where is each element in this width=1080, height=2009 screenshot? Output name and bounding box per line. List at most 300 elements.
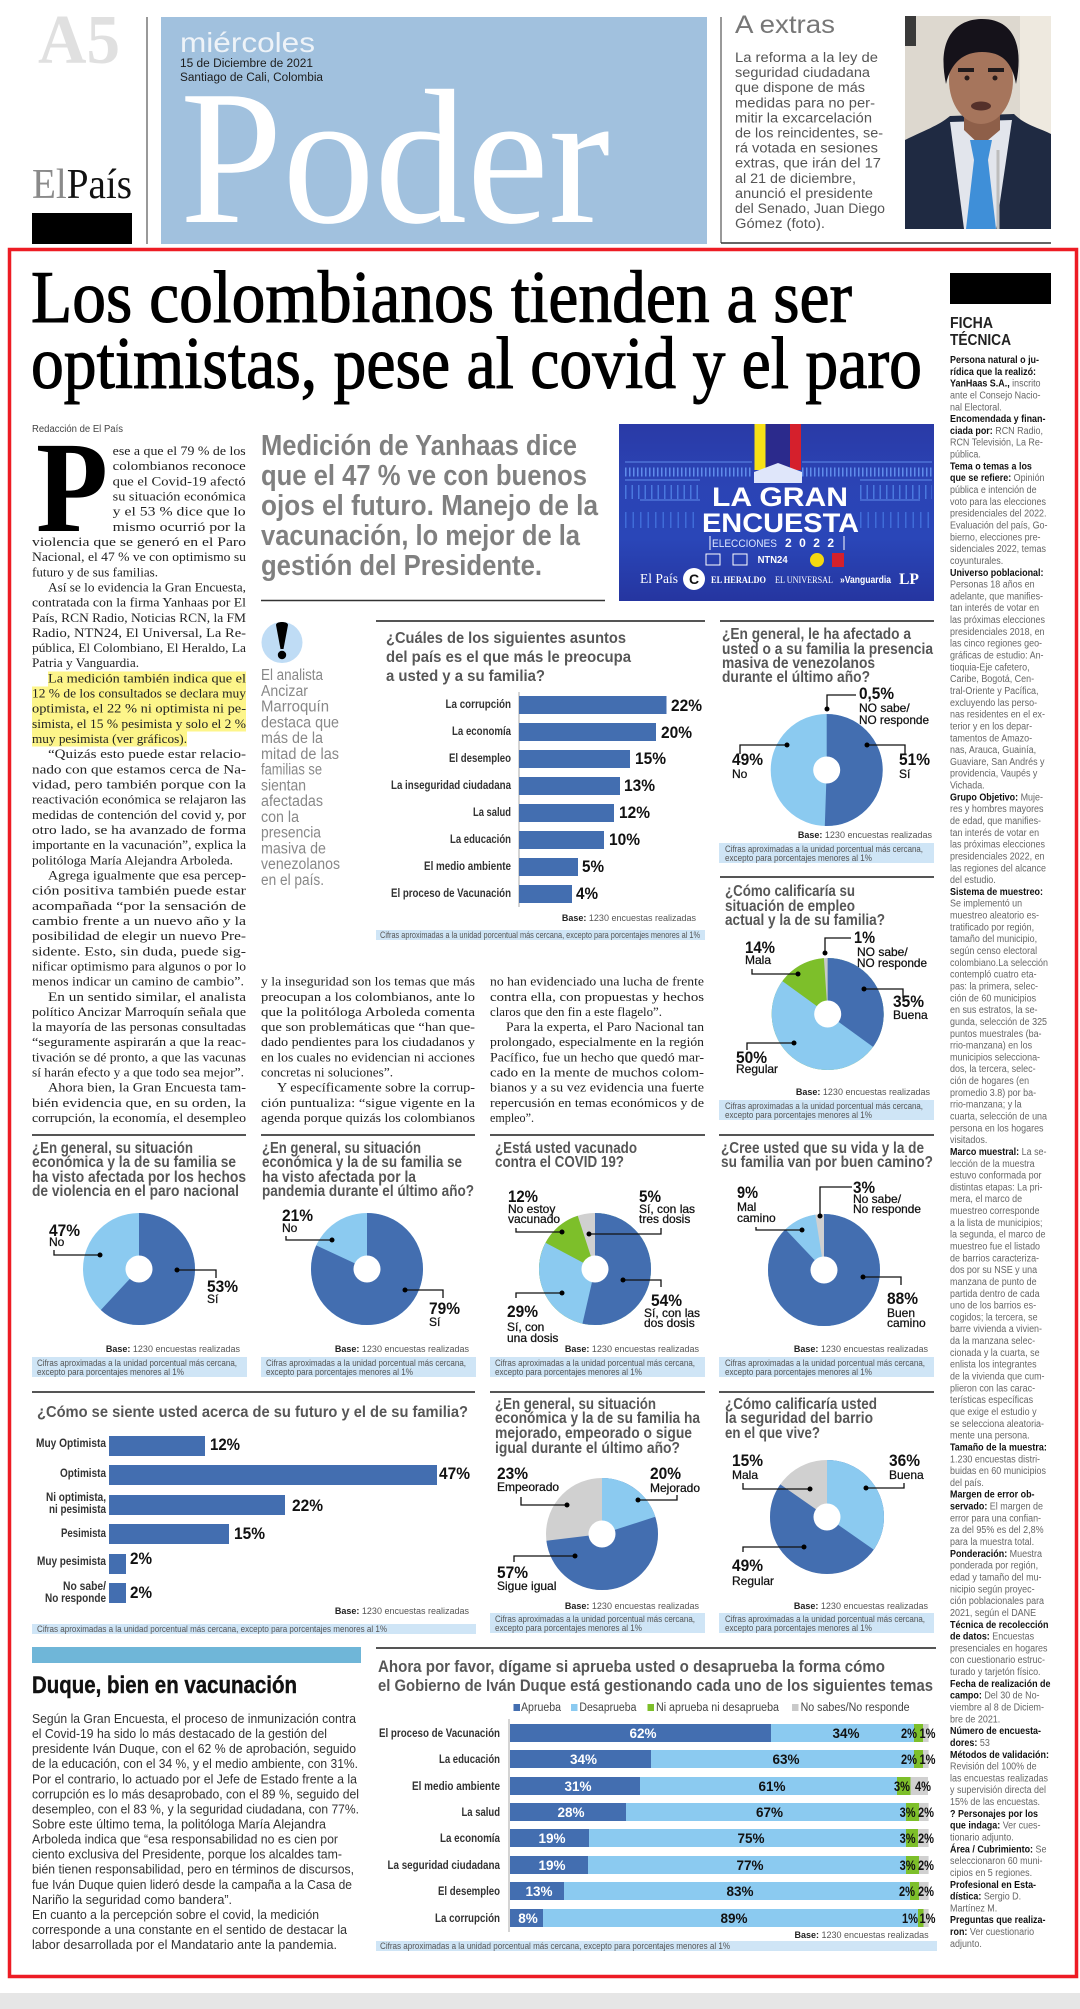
text block: ficha: presenciales en hogares <box>950 1643 1048 1655</box>
text block: ficha: Evaluación del país, Go- <box>950 520 1048 532</box>
pie chart: pandemia: Sí <box>429 1315 441 1329</box>
text block: ficha: pública e intención de <box>950 485 1037 496</box>
text block: ficha: ción de hogares (en <box>950 1076 1029 1087</box>
row: La corrupción: 8% <box>518 1911 538 1926</box>
callout: analista: familias se <box>261 762 322 779</box>
bar chart: asuntos que preocupan: Base: 1230 encuestas realizadas <box>562 913 696 923</box>
text block: ficha: presidenciales del 2022. <box>950 508 1047 520</box>
article column 1 <box>32 416 247 1125</box>
article column 1: simista, el 15 % pesimista y solo el 2 % <box>32 716 246 731</box>
black box: masthead <box>32 213 132 244</box>
panel: A extras <box>721 11 1051 243</box>
row: La educación: 1% <box>920 1752 936 1767</box>
section banner: Poder: Poder <box>180 51 610 264</box>
text block: ficha: Marco muestral: La se- <box>950 1146 1047 1158</box>
panel: Duque, bien en vacunación: desempleo, con el 83 %, y la seguridad ciudadana, con 77%. <box>32 1801 359 1816</box>
pie chart: pandemia: 79% <box>429 1299 460 1318</box>
row: La economía: La economía <box>440 1833 501 1845</box>
text block: ficha: y supervisión directa del <box>950 1785 1046 1796</box>
text block: ficha: lección de la muestra <box>950 1158 1035 1170</box>
panel: Duque, bien en vacunación: Según la Gran Encuesta, el proceso de inmunización contra <box>32 1711 357 1726</box>
text block: ficha: persona en los hogares <box>950 1123 1044 1135</box>
text block: ficha: nas residentes en el ex- <box>950 709 1045 721</box>
pie chart: seguridad del barrio: 36% <box>889 1451 920 1470</box>
pie chart: violencia paro nacional: ha visto afectada por los hechos <box>32 1169 246 1186</box>
text block: ficha: las encuestas realizadas <box>950 1773 1048 1785</box>
black box <box>950 273 1051 304</box>
article column 2: en los cuales no evidencian ni acciones <box>261 1049 475 1064</box>
image: La Gran Encuesta banner: ELECCIONES <box>712 538 777 550</box>
subheading: ojos el futuro. Manejo de la <box>261 490 599 522</box>
text block: ficha: tioquia-Eje cafetero, <box>950 662 1030 674</box>
row: La economía: 19% <box>538 1831 566 1846</box>
text block: ficha: partida dentro de cada <box>950 1288 1040 1300</box>
text block: ficha: excluyendo las perso- <box>950 697 1037 709</box>
row: La salud: 2% <box>918 1805 934 1820</box>
bar chart: futuro: No sabe/ <box>63 1581 107 1593</box>
article column 1: político Ancizar Marroquín señala que <box>32 1004 246 1019</box>
icon: exclamation mark <box>262 622 302 663</box>
heading: ficha técnica: FICHA <box>950 315 993 332</box>
pie chart: seguridad del barrio: 49% <box>732 1556 763 1575</box>
article column 1: pública, El Colombiano, El Heraldo, La <box>32 640 246 655</box>
panel: Duque, bien en vacunación: de la educación, con el 34 %, y el medio ambiente, con 31%. <box>32 1756 358 1771</box>
pie chart: violencia paro nacional: Base: 1230 encuestas realizadas <box>106 1344 240 1354</box>
bar chart: asuntos que preocupan: 20% <box>661 723 692 742</box>
article column 1: acompañada “por la sensación de <box>32 898 246 913</box>
bar chart: futuro: Optimista <box>60 1468 107 1480</box>
stacked bar chart: aprobación gestión Duque <box>376 1648 937 1951</box>
pie chart: vacunado: Sí, con <box>507 1320 544 1334</box>
title <box>31 257 922 405</box>
row: La educación: La educación <box>439 1754 500 1766</box>
row: El proceso de Vacunación: 34% <box>832 1726 860 1741</box>
bar chart: asuntos que preocupan: 10% <box>609 830 640 849</box>
callout: analista <box>261 622 340 889</box>
text block: ficha: adelante, que manifies- <box>950 591 1043 603</box>
bar chart: asuntos que preocupan <box>376 621 705 940</box>
text block: ficha: municipios selecciona- <box>950 1052 1040 1064</box>
text block: ficha: del estudio. <box>950 875 996 886</box>
article column 3: claros que den fin a este flagelo”. <box>490 1004 662 1019</box>
row: El proceso de Vacunación: 2% <box>901 1726 917 1741</box>
text block: ficha: tral-Oriente y Pacífica, <box>950 685 1039 697</box>
callout: analista: venezolanos <box>261 856 340 873</box>
article column 1: nificar optimismo para algunos o por lo <box>32 958 246 973</box>
article column 1: ese a que el 79 % de los <box>113 443 246 458</box>
article column 1: importante en la vacunación”, explica la <box>32 837 246 852</box>
pie chart: situación económica: 23% <box>497 1464 528 1483</box>
text block: ficha: ante el Consejo Nacio- <box>950 390 1041 402</box>
text block: ficha: Número de encuesta- <box>950 1726 1041 1737</box>
panel: Duque, bien en vacunación: bién tienen responsabilidad, pero en términos de discursos, <box>32 1862 354 1877</box>
text block: ficha: Vichada. <box>950 780 985 792</box>
pie chart: vacunado: Base: 1230 encuestas realizadas <box>565 1344 699 1354</box>
image: La Gran Encuesta banner <box>619 424 934 601</box>
article column 1: colombianos reconoce <box>113 458 246 473</box>
pie chart: empleo: 35% <box>893 992 924 1011</box>
pie chart: vacunado: vacunado <box>508 1212 560 1226</box>
article column 1: la mayoría de las personas consultadas <box>32 1019 246 1034</box>
bar chart: asuntos que preocupan: 4% <box>576 884 598 903</box>
article column 1: País, RCN Radio, Noticias RCN, la FM <box>32 610 246 625</box>
pie chart: buen camino: Mal <box>737 1200 756 1214</box>
row: La salud: La salud <box>462 1807 500 1819</box>
bar chart: asuntos que preocupan: El proceso de Vacunación <box>391 888 511 900</box>
page number A5: A5 <box>38 2 120 79</box>
article column 1: 12 % de los consultados se declara muy <box>32 686 247 701</box>
bar chart: futuro: ¿Cómo se siente usted acerca de su futuro y el de su familia? <box>37 1404 468 1421</box>
text block: ficha: viembre al 8 de Diciem- <box>950 1702 1044 1714</box>
text block: ficha: ción poblacionales para <box>950 1596 1045 1607</box>
bar chart: futuro: ni pesimista <box>49 1504 107 1516</box>
image: La Gran Encuesta banner: LA GRAN <box>712 482 848 512</box>
article column 3: repercusión en temas económicos y de <box>490 1095 704 1110</box>
text block: ficha: mera, el marco de <box>950 1194 1022 1205</box>
text block: ficha: que exige el estudio y <box>950 1406 1037 1418</box>
logo El País: ElPaís <box>32 162 132 208</box>
legend: Aprueba <box>521 1702 562 1714</box>
pie chart: empleo: 50% <box>736 1048 767 1067</box>
pie chart: situación económica: económica y la de su familia ha <box>495 1410 700 1427</box>
article column 2: preocupan a los colombianos, ante lo <box>261 989 475 1004</box>
text block: ficha: las próximas elecciones <box>950 839 1045 851</box>
article column 1: Así se lo evidencia la Gran Encuesta, <box>48 579 246 594</box>
row: La educación <box>439 1750 936 1768</box>
panel: A extras: mitir la excarcelación <box>735 110 872 125</box>
pie chart: pandemia: Base: 1230 encuestas realizadas <box>335 1344 469 1354</box>
callout: analista: El analista <box>261 667 323 684</box>
section banner: Poder: 15 de Diciembre de 2021 <box>180 58 313 70</box>
bar chart: futuro: No responde <box>45 1593 106 1605</box>
article column 1: Agrega igualmente que esa percep- <box>48 868 246 882</box>
text block: ficha: dística: Sergio D. <box>950 1891 1021 1903</box>
pie chart: pandemia: 21% <box>282 1206 313 1225</box>
bar chart: futuro: Muy Optimista <box>36 1438 107 1450</box>
row: El proceso de Vacunación: 62% <box>629 1726 657 1741</box>
text block: ficha: dos, la tercera, selec- <box>950 1064 1036 1075</box>
panel: Duque, bien en vacunación: Duque, bien en vacunación <box>32 1672 297 1699</box>
text block: ficha: nas, Arauca, Guainía, <box>950 745 1036 756</box>
panel: A extras: Gómez (foto). <box>735 216 825 231</box>
text block: ficha: tan interés de votar en <box>950 827 1039 839</box>
pie chart: vacunado <box>490 1135 705 1377</box>
subheading <box>261 430 605 600</box>
article column 2: dado pendientes para los ciudadanos y <box>261 1034 476 1049</box>
text block: ficha: muestreo fue el listado <box>950 1241 1040 1253</box>
text block: ficha: la segunda, el marco de <box>950 1229 1046 1241</box>
pie chart: pandemia: Cifras aproximadas a la unidad porcentual más cercana, <box>266 1358 466 1368</box>
pie chart: buen camino: 88% <box>887 1289 918 1308</box>
text block: ficha: Universo poblacional: <box>950 567 1043 579</box>
panel: Duque, bien en vacunación: presidente Iván Duque, con el 62 % de aprobación, seguido <box>32 1741 356 1756</box>
row: El medio ambiente: 4% <box>915 1779 931 1794</box>
text block: ficha: cionada y la cuarta, se <box>950 1347 1040 1359</box>
pie chart: pandemia: No <box>282 1221 298 1235</box>
article column 2: que son problemáticas que “han que- <box>261 1019 475 1034</box>
pie chart: empleo: Buena <box>893 1008 928 1022</box>
article column 1: sidente. Esto, sin duda, puede sig- <box>32 943 246 958</box>
article column 1: violencia que se generó en el Paro <box>32 534 246 549</box>
bar chart: asuntos que preocupan: a usted y a su familia? <box>386 668 545 685</box>
article column 1: otro lado, se ha avanzado de forma <box>32 822 246 837</box>
pie chart: violencia paro nacional <box>32 1135 247 1377</box>
text block: ficha: a la lista de municipios; <box>950 1217 1043 1229</box>
row: La seguridad ciudadana: 77% <box>736 1858 764 1873</box>
byline: Redacción de El País <box>32 424 123 435</box>
pie chart: situación económica: Empeorado <box>497 1480 559 1494</box>
text block: ficha: Martínez M. <box>950 1903 997 1915</box>
bar chart: futuro: Muy pesimista <box>37 1556 107 1568</box>
text block: ficha: en sus estratos, la se- <box>950 1005 1038 1016</box>
text block: ficha: bierno, elecciones pre- <box>950 532 1041 544</box>
text block: ficha: Revisión del 100% de <box>950 1761 1037 1773</box>
panel: ficha técnica <box>950 273 1053 1950</box>
callout: analista: Ancizar <box>261 683 308 700</box>
bar chart: asuntos que preocupan: 22% <box>671 696 702 715</box>
pie chart: vacunado: 54% <box>651 1291 682 1310</box>
article column 1: sí harán efecto y a que todo sea mejor”. <box>32 1065 244 1080</box>
pie chart: pandemia: ¿En general, su situación <box>262 1140 421 1157</box>
pie chart: situación económica: Sigue igual <box>497 1579 556 1593</box>
pie chart: venezolanos: 51% <box>899 750 930 769</box>
text block: ficha: 1.230 encuestas distri- <box>950 1454 1040 1465</box>
pie chart: venezolanos: excepto para porcentajes menores al 1% <box>725 853 872 863</box>
bar chart: futuro: 2% <box>130 1583 152 1602</box>
pie chart: buen camino: Base: 1230 encuestas realizadas <box>794 1344 928 1354</box>
title: optimistas, pese al covid y el paro <box>31 323 922 405</box>
pie chart: seguridad del barrio <box>719 1392 934 1633</box>
pie chart: seguridad del barrio: Base: 1230 encuestas realizadas <box>794 1601 928 1611</box>
pie chart: pandemia: excepto para porcentajes menores al 1% <box>266 1367 413 1377</box>
bar chart: asuntos que preocupan: La inseguridad ciudadana <box>391 780 512 792</box>
image: La Gran Encuesta banner: »Vanguardia <box>840 574 891 586</box>
pie chart: vacunado: 12% <box>508 1187 538 1206</box>
article column 1: tivación se dé pronto, a que las vacunas <box>32 1049 246 1064</box>
row: La salud: 67% <box>756 1805 783 1820</box>
image: La Gran Encuesta banner: EL UNIVERSAL <box>775 576 833 586</box>
image: La Gran Encuesta banner: 2 0 2 2 <box>785 536 834 550</box>
pie chart: venezolanos: NO responde <box>859 713 929 727</box>
text block: ficha: ponderada por región, <box>950 1560 1038 1572</box>
stacked bar chart: aprobación gestión Duque: Ahora por favor, dígame si aprueba usted o desaprueba la forma cómo <box>378 1657 885 1676</box>
bar chart: asuntos que preocupan: El desempleo <box>449 753 511 765</box>
panel: Duque, bien en vacunación: el Covid-19 ha sido lo más destacado de la gestión del <box>32 1726 327 1741</box>
row: El desempleo <box>438 1882 934 1900</box>
bar chart: asuntos que preocupan: La corrupción <box>446 699 511 711</box>
pie chart: vacunado: No estoy <box>508 1202 555 1216</box>
article column 1: contratada con la firma Yanhaas por El <box>32 595 246 610</box>
panel: A extras: La reforma a la ley de <box>735 50 878 65</box>
image: La Gran Encuesta banner: LP <box>899 571 919 588</box>
article column 1: muy pesimista (ver gráficos). <box>32 731 187 746</box>
article column 2: Y específicamente sobre la corrup- <box>277 1080 475 1095</box>
article column 1: corrupción, la economía, el desempleo <box>32 1110 246 1125</box>
article column 1: optimista, el 22 % ni optimista ni pe- <box>32 701 246 716</box>
callout: analista: Marroquín <box>261 698 329 716</box>
article column 2 <box>261 974 476 1125</box>
pie chart: situación económica: mejorado, empeorado o sigue <box>495 1425 692 1442</box>
pie chart: violencia paro nacional: de violencia en el paro nacional <box>32 1183 239 1200</box>
text block: ficha: uno de los barrios es- <box>950 1300 1036 1312</box>
stacked bar chart: aprobación gestión Duque: Base: 1230 encuestas realizadas <box>795 1930 929 1940</box>
stacked bar chart: aprobación gestión Duque: el Gobierno de Iván Duque está gestionando cada uno de los siguientes temas <box>378 1676 933 1695</box>
article column 3: Pacífico, fue un hecho que quedó mar- <box>490 1049 704 1064</box>
panel: Duque, bien en vacunación: En cuanto a la percepción sobre el covid, la medición <box>32 1907 319 1922</box>
pie chart: buen camino: camino <box>887 1316 926 1330</box>
text block: ficha: da la manzana selec- <box>950 1336 1035 1347</box>
text block: ficha: cogidos; la tercera, se <box>950 1312 1038 1324</box>
pie chart: seguridad del barrio: Mala <box>732 1468 758 1482</box>
pie chart: vacunado: Sí, con las <box>644 1306 700 1320</box>
pie chart: empleo: NO responde <box>857 956 927 970</box>
pie chart: venezolanos: NO sabe/ <box>859 701 910 715</box>
pie chart: buen camino <box>719 1135 934 1377</box>
text block: ficha: adjunto. <box>950 1938 982 1950</box>
text block: ficha: Profesional en Esta- <box>950 1879 1036 1891</box>
text block: ficha: sidenciales 2022, temas <box>950 544 1046 555</box>
pie chart: empleo <box>719 877 934 1120</box>
pie chart: situación económica: Mejorado <box>650 1481 700 1495</box>
text block: ficha: ción de 60 municipios <box>950 993 1036 1005</box>
callout: analista: sientan <box>261 777 306 794</box>
text block: ficha: Área / Cubrimiento: Se <box>950 1844 1046 1856</box>
pie chart: violencia paro nacional: económica y la de su familia se <box>32 1154 236 1171</box>
row: La economía: 3% <box>900 1831 916 1846</box>
row: El medio ambiente: 61% <box>758 1779 786 1794</box>
pie chart: empleo: excepto para porcentajes menores al 1% <box>725 1110 872 1120</box>
panel: Duque, bien en vacunación: labor desarrollada por el Mandatario ante la pandemia. <box>32 1937 337 1952</box>
text block: ficha: distintas etapas: La pri- <box>950 1182 1043 1194</box>
pie chart: venezolanos: 49% <box>732 750 763 769</box>
text block: ficha: 2021, según el DANE <box>950 1607 1037 1619</box>
image: La Gran Encuesta banner: EL HERALDO <box>711 576 766 586</box>
pie chart: vacunado: ¿Está usted vacunado <box>495 1140 637 1157</box>
row: El proceso de Vacunación: 1% <box>920 1726 936 1741</box>
pie chart: violencia paro nacional: Sí <box>207 1292 219 1306</box>
panel: A extras: rá votada en sesiones <box>735 141 878 156</box>
pie chart: pandemia: ha visto afectada por la <box>262 1169 416 1186</box>
row: La corrupción <box>435 1909 936 1927</box>
text block: ficha: Métodos de validación: <box>950 1749 1049 1761</box>
text block: ficha: campo: Del 30 de No- <box>950 1690 1040 1702</box>
panel: Duque, bien en vacunación: fue Iván Duque quien lideró desde la campaña a la Casa de <box>32 1877 352 1892</box>
callout: analista: presencia <box>261 825 321 842</box>
pie chart: situación económica: 57% <box>497 1563 528 1582</box>
bar chart: futuro: Base: 1230 encuestas realizadas <box>335 1606 469 1616</box>
article column 3: no han evidenciado una lucha de frente <box>490 974 704 989</box>
pie chart: seguridad del barrio: la seguridad del barrio <box>725 1410 873 1427</box>
pie chart: venezolanos: Sí <box>899 767 911 781</box>
panel: A extras: al 21 de diciembre, <box>735 171 856 186</box>
subheading: Medición de Yanhaas dice <box>261 430 577 462</box>
row: El medio ambiente: 3% <box>894 1779 910 1794</box>
text block: ficha: Fecha de realización de <box>950 1678 1051 1690</box>
text block: ficha: coyunturales. <box>950 555 1003 567</box>
panel: A extras: medidas para no per- <box>735 95 875 110</box>
panel: A extras: anunció el presidente <box>735 186 873 201</box>
bar chart: futuro: Cifras aproximadas a la unidad porcentual más cercana, excepto para porcentajes menores al 1% <box>37 1624 387 1634</box>
article column 3: prolongado, especialmente en la región <box>490 1034 705 1049</box>
article column 1: menos indicar un camino de cambio”. <box>32 974 244 989</box>
text block: ficha: según censo electoral <box>950 945 1037 957</box>
bar chart: asuntos que preocupan: 5% <box>582 857 604 876</box>
row: El medio ambiente <box>412 1777 931 1795</box>
text block: ficha: Persona natural o ju- <box>950 354 1039 366</box>
legend: Desaprueba <box>579 1702 637 1714</box>
text block: ficha: de la vivienda que cum- <box>950 1371 1045 1383</box>
bar chart: futuro: 12% <box>210 1435 240 1454</box>
panel: Duque, bien en vacunación: corrupción es lo más desaprobado, con el 89 %, seguido del <box>32 1786 359 1801</box>
row: La salud: 3% <box>900 1805 916 1820</box>
image: La Gran Encuesta banner: ENCUESTA <box>702 508 859 538</box>
bar chart: futuro: Ni optimista, <box>46 1492 106 1504</box>
text block: ficha: estuvo conformada por <box>950 1170 1042 1182</box>
pie chart: violencia paro nacional: 53% <box>207 1277 238 1296</box>
pie chart: vacunado: contra el COVID 19? <box>495 1154 624 1171</box>
pie chart: venezolanos: Base: 1230 encuestas realizadas <box>798 830 932 840</box>
panel: Duque, bien en vacunación: Sobre este último tema, la politóloga María Alejandra <box>32 1816 327 1832</box>
bar chart: asuntos que preocupan: ¿Cuáles de los siguientes asuntos <box>386 630 626 647</box>
row: La seguridad ciudadana <box>388 1856 934 1874</box>
row: La economía <box>440 1829 934 1847</box>
text block: ficha: terior y en los depar- <box>950 721 1032 733</box>
text block: ficha: ? Personajes por los <box>950 1808 1038 1820</box>
pie chart: buen camino: Cifras aproximadas a la unidad porcentual más cercana, <box>725 1358 925 1368</box>
text block: ficha: rrio-manzana; y la <box>950 1099 1022 1111</box>
text block: ficha: que se refiere: Opinión <box>950 473 1045 484</box>
text block: ficha: tamaño del municipio, <box>950 934 1037 945</box>
panel: A extras: del Senado, Juan Diego <box>735 201 885 216</box>
pie chart: empleo: Cifras aproximadas a la unidad porcentual más cercana, <box>725 1101 923 1111</box>
bar chart: asuntos que preocupan: 12% <box>619 803 650 822</box>
article column 1: bién evidencia que, en su orden, la <box>32 1095 246 1110</box>
text block: ficha: de barrios caracteriza- <box>950 1253 1039 1265</box>
text block: ficha: para la muestra total. <box>950 1536 1034 1548</box>
article column 1: ción positiva también puede estar <box>32 883 247 898</box>
row: La corrupción: 1% <box>920 1911 936 1926</box>
row: El desempleo: 83% <box>726 1884 754 1899</box>
bar chart: asuntos que preocupan: del país es el que más le preocupa <box>386 649 631 666</box>
text block: ficha: muestreo aleatorio es- <box>950 910 1039 922</box>
text block: ficha: Técnica de recolección <box>950 1619 1049 1631</box>
pie chart: empleo: 14% <box>745 938 775 957</box>
article column 1: que el Covid-19 afectó <box>113 473 246 488</box>
pie chart: vacunado: una dosis <box>507 1331 558 1345</box>
article column 3: bianos y a su vez evidencia una fuerte <box>490 1080 704 1095</box>
text block: ficha: pas: la primera, selec- <box>950 981 1038 993</box>
title: Los colombianos tienden a ser <box>31 257 852 339</box>
text block: ficha: za del 95% es del 2,8% <box>950 1525 1044 1536</box>
pie chart: vacunado: 29% <box>507 1302 538 1321</box>
callout: analista: masiva de <box>261 840 326 858</box>
text block: ficha: Preguntas que realiza- <box>950 1915 1045 1926</box>
article column 2: agenda porque quizás los colombianos <box>261 1110 475 1125</box>
article column 2: concretas ni soluciones”. <box>261 1065 393 1080</box>
text block: ficha: edad y tamaño del mu- <box>950 1572 1042 1584</box>
text block: ficha: cipios en 5 regiones. <box>950 1867 1032 1879</box>
pie chart: buen camino: 9% <box>737 1183 758 1202</box>
pie chart: empleo: Regular <box>736 1062 778 1076</box>
pie chart: buen camino: Buen <box>887 1306 915 1320</box>
article column 1: vidad, pero también porque con la <box>32 776 246 792</box>
pie chart: empleo: situación de empleo <box>725 898 855 915</box>
subheading: vacunación, lo mejor de la <box>261 520 581 552</box>
pie chart: situación económica: igual durante el último año? <box>495 1440 680 1457</box>
pie chart: venezolanos: masiva de venezolanos <box>722 655 875 672</box>
row: La corrupción: 1% <box>902 1911 918 1926</box>
pie chart: vacunado: dos dosis <box>644 1316 695 1330</box>
